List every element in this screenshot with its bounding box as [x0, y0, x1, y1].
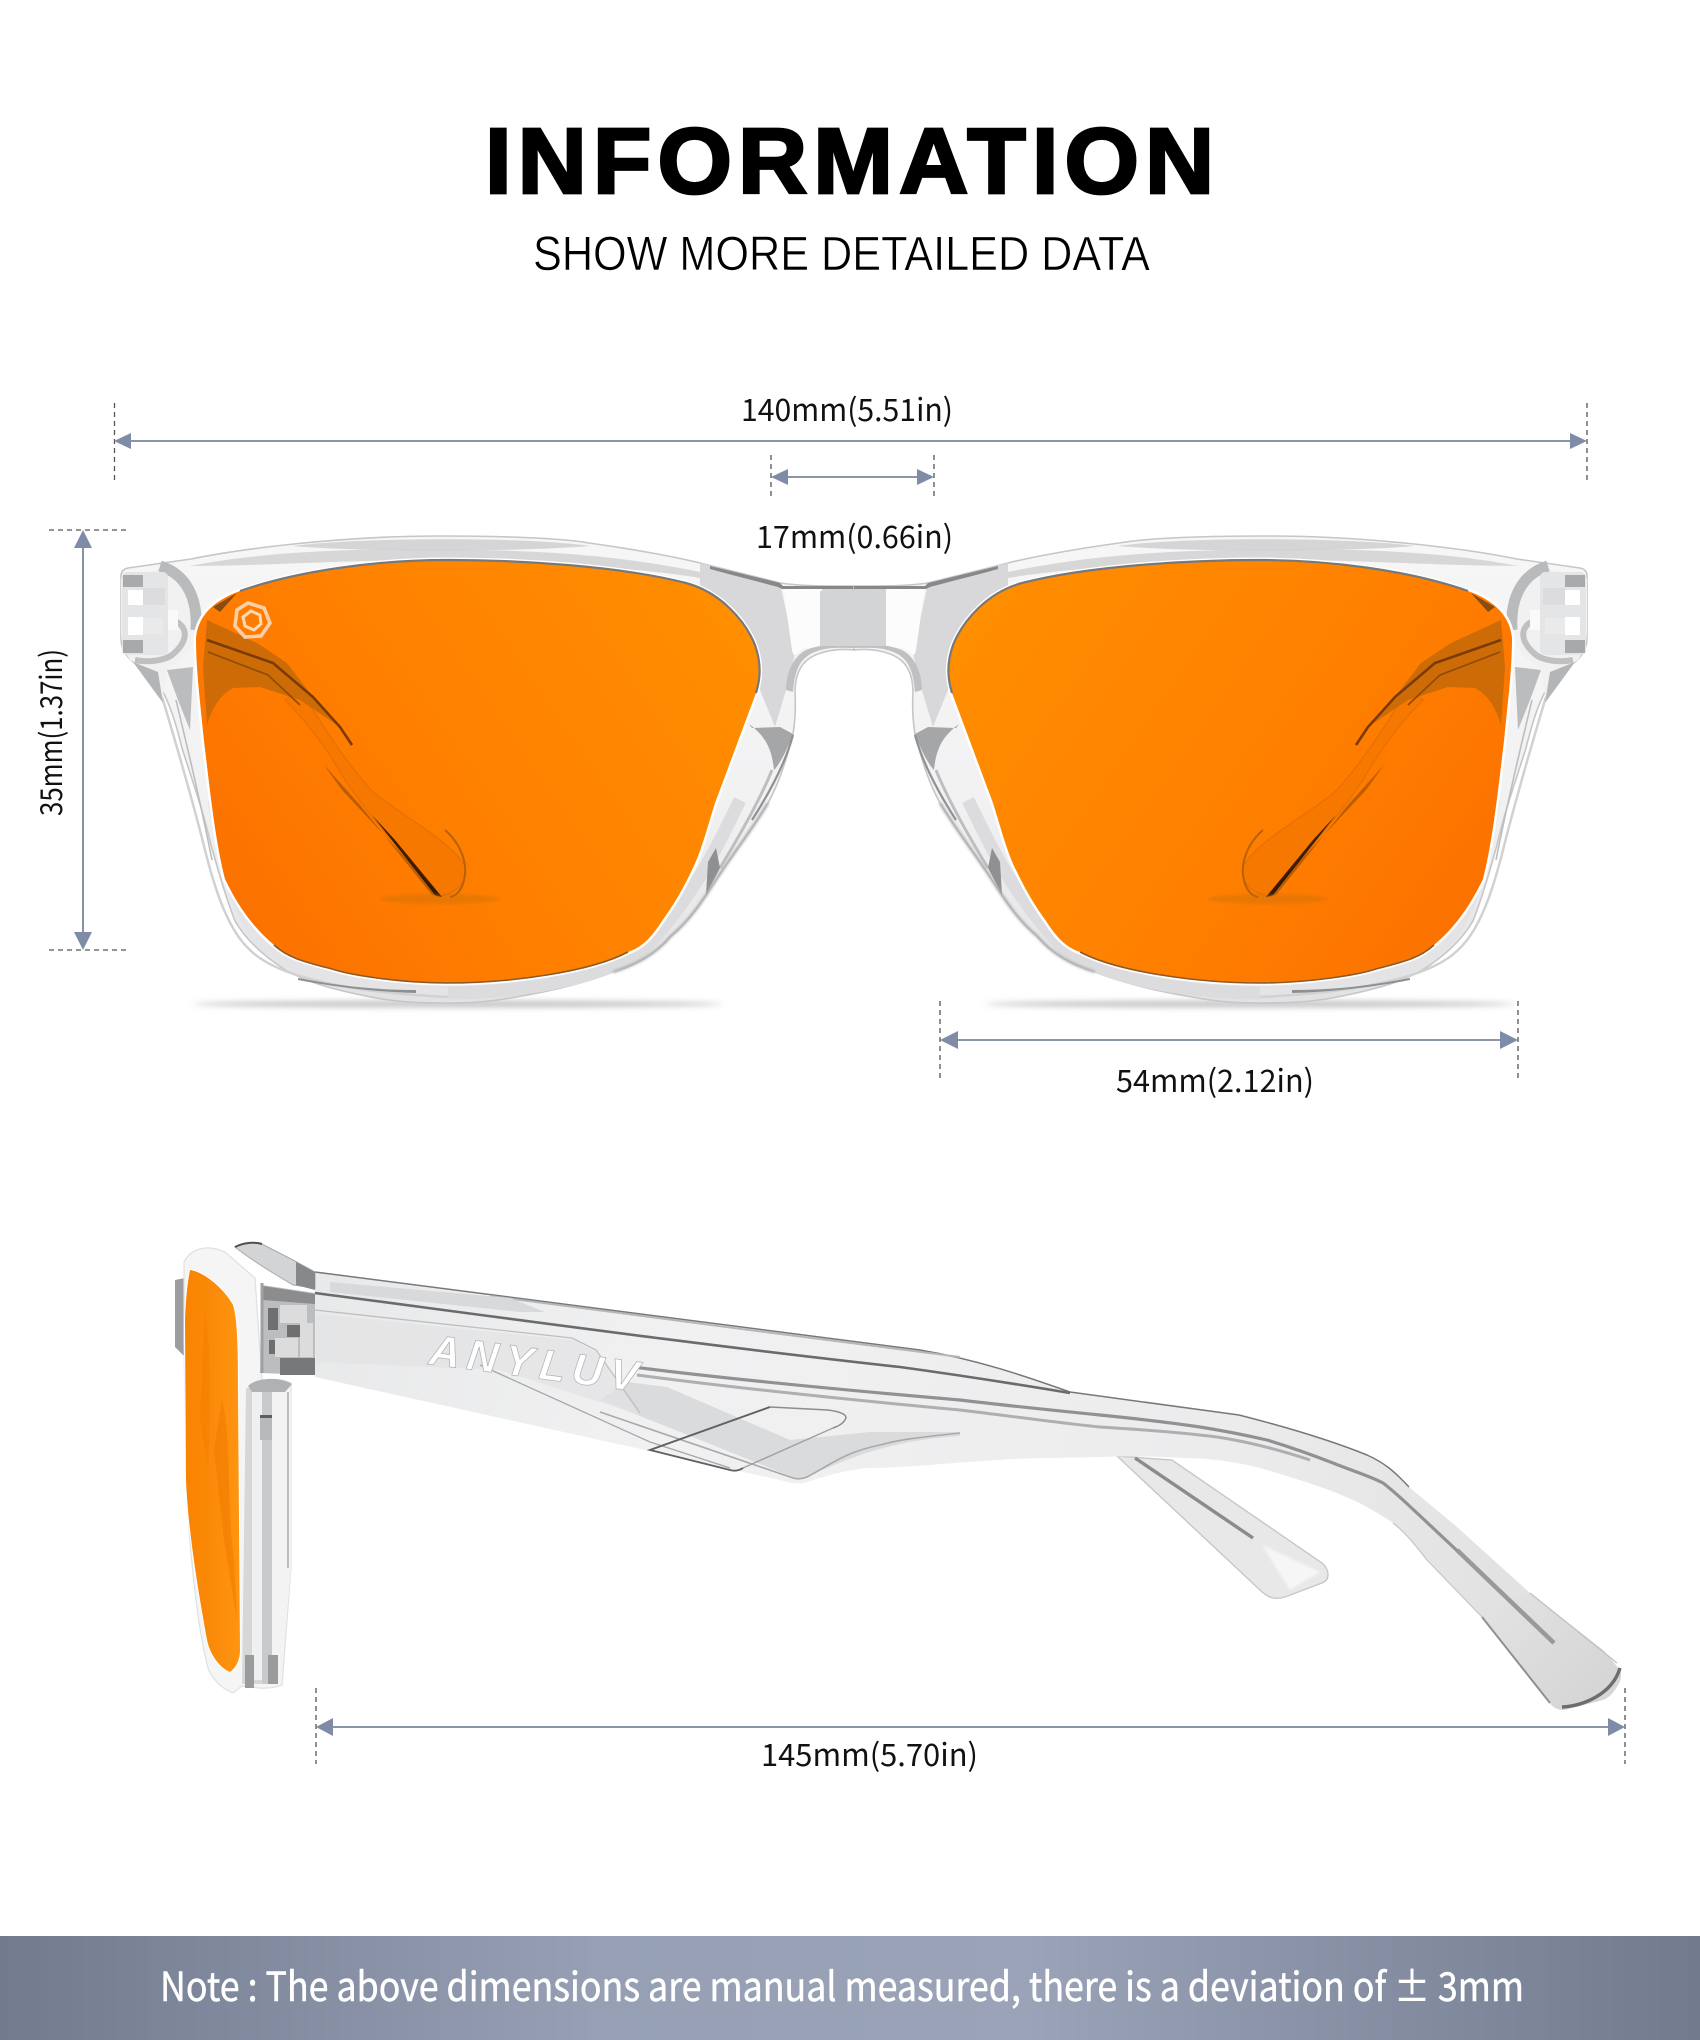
- bridge highlight: [820, 591, 884, 646]
- dimension: temple length 145mm: [316, 1688, 1625, 1775]
- dimension: lens height 35mm: 35mm(1.37in): [27, 649, 71, 816]
- ground shadows: [193, 1000, 1515, 1008]
- front view of glasses: [121, 536, 1587, 1008]
- hinge: [121, 566, 200, 730]
- side view of glasses: [175, 1243, 1621, 1710]
- dimension: bridge 17mm: [756, 455, 953, 557]
- left half of frame with lens: [121, 536, 854, 1003]
- brand mark on temple: ANYLUV: [426, 1326, 644, 1402]
- dimension: lens height 35mm: [27, 530, 126, 950]
- dimension: lens width 54mm: 54mm(2.12in): [1116, 1056, 1314, 1101]
- main temple: [315, 1272, 1621, 1710]
- lens: [196, 560, 762, 983]
- right half of frame with lens: [854, 536, 1587, 1003]
- note bar: Note : The above dimensions are manual measured, there is a deviation of ± 3mm: [160, 1955, 1524, 2013]
- dimension: temple length 145mm: 145mm(5.70in): [761, 1730, 978, 1775]
- title: INFORMATION: [485, 110, 1214, 214]
- note bar: [0, 1936, 1700, 2040]
- dimension: overall width 140mm: 140mm(5.51in): [741, 385, 953, 430]
- side lens: [185, 1270, 240, 1672]
- hinge side: [235, 1243, 315, 1375]
- temple seen through lens: [203, 593, 500, 904]
- temple window outline: [650, 1407, 846, 1471]
- subtitle: SHOW MORE DETAILED DATA: [533, 228, 1150, 281]
- lens logo: [235, 603, 270, 637]
- front frame side: [184, 1248, 291, 1693]
- nose pad seen through lens: [690, 700, 762, 890]
- dimension: overall width 140mm: [114, 385, 1587, 481]
- nose piece: [175, 1278, 185, 1357]
- dimension: bridge 17mm: 17mm(0.66in): [756, 512, 953, 557]
- dimension: lens width 54mm: [940, 1001, 1518, 1101]
- far temple: [1117, 1456, 1328, 1598]
